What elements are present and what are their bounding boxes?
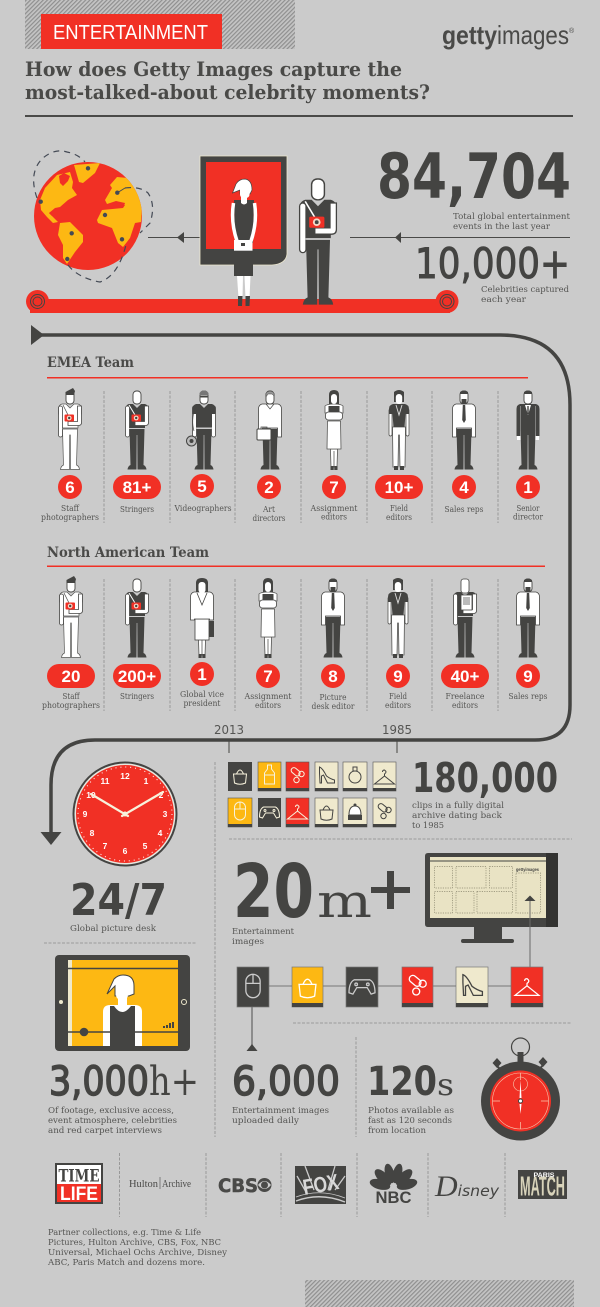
- stat: 180,000 clips: 180,000: [412, 754, 558, 802]
- global vice president: [180, 578, 224, 709]
- stat: 3,000h+ footage: [48, 1059, 199, 1136]
- stringers: Stringers: [120, 505, 154, 515]
- videographers: Videographers: [174, 504, 232, 514]
- staff photographers: [41, 388, 99, 523]
- timeline year labels: [214, 722, 412, 753]
- assignment editors: [244, 578, 292, 711]
- videographers: 5: [197, 477, 207, 496]
- field editors: [385, 578, 411, 711]
- logo: Paris Match: PARIS: [534, 1173, 554, 1179]
- staff photographers: photographers: [42, 701, 100, 711]
- clock: 8: [90, 828, 95, 838]
- assignment editors: 7: [263, 667, 273, 686]
- logo: Hulton Archive: Archive: [162, 1179, 191, 1190]
- staff photographers: photographers: [41, 513, 99, 523]
- workflow row: [237, 967, 543, 1007]
- stat: 120s photos: 120: [367, 1059, 437, 1105]
- stat: 84,704 events: Total global entertainment: [453, 212, 571, 222]
- stat: 10,000+ celebrities: Celebrities captured: [481, 285, 569, 295]
- staff photographers: 6: [65, 478, 75, 497]
- clock: 9: [83, 809, 88, 819]
- field editors: editors: [386, 513, 412, 523]
- stringers: [113, 391, 161, 515]
- staff photographers: 20: [62, 667, 80, 686]
- partner collections text: Universal, Michael Ochs Archive, Disney: [48, 1248, 227, 1258]
- logo: Time Life: LIFE: [60, 1184, 98, 1205]
- stat: 20m+ images: m: [317, 874, 372, 928]
- partner collections text: Partner collections, e.g. Time & Life: [48, 1228, 201, 1238]
- logo: Hulton Archive: Hulton: [129, 1179, 158, 1190]
- stat: 3,000h+ footage: 3,000: [49, 1059, 149, 1105]
- red carpet: [26, 290, 458, 313]
- celebrity figure: [232, 179, 255, 306]
- staff photographers: Staff: [62, 692, 80, 702]
- monitor: gettyimages: [516, 867, 539, 872]
- partner collections text: ABC, Paris Match and dozens more.: [47, 1258, 205, 1268]
- senior director: Senior: [516, 504, 540, 514]
- heading: North American team: North American Team: [47, 545, 209, 561]
- clock: 5: [143, 841, 148, 851]
- category tag: entertainment: ENTERTAINMENT: [53, 22, 208, 44]
- assignment editors: [310, 390, 358, 522]
- monitor: [425, 853, 558, 943]
- workflow arrow into monitor: [524, 896, 536, 967]
- stat: 3,000h+ footage: h+: [149, 1059, 199, 1105]
- art directors: Art: [262, 505, 275, 515]
- photographer figure: [300, 179, 336, 305]
- stat: 20m+ images: 20: [233, 849, 314, 935]
- stat: 180,000 clips: to 1985: [412, 821, 444, 831]
- global vice president: 1: [197, 665, 207, 684]
- timeline year labels: 1985: [382, 722, 412, 737]
- global vice president: president: [184, 699, 221, 709]
- stringers: 200+: [118, 667, 156, 686]
- clock: 12: [120, 771, 130, 781]
- freelance editors: [441, 579, 489, 711]
- panel: North American team: [42, 576, 548, 712]
- field editors: [375, 390, 423, 523]
- clock: 7: [103, 841, 108, 851]
- picture desk editor: Picture: [320, 693, 346, 703]
- assignment editors: 7: [329, 478, 339, 497]
- staff photographers: [42, 576, 100, 711]
- sales reps: [444, 390, 484, 515]
- category tag: entertainment: [41, 14, 222, 49]
- picture desk editor: desk editor: [312, 702, 355, 712]
- archive icon grid: [228, 762, 396, 827]
- stringers: 81+: [123, 478, 151, 497]
- logo: gettyimages: ®: [569, 27, 575, 35]
- freelance editors: Freelance: [446, 692, 484, 702]
- sales reps: 9: [523, 667, 533, 686]
- logo: Time Life: [55, 1163, 103, 1205]
- partner collections text: Pictures, Hulton Archive, CBS, Fox, NBC: [48, 1238, 221, 1248]
- global vice president: Global vice: [180, 690, 224, 700]
- arrow: poster to globe: [148, 232, 200, 243]
- stat: 6,000 uploaded: 6,000: [232, 1059, 340, 1105]
- partner collections text: [47, 1228, 227, 1268]
- assignment editors: editors: [255, 701, 281, 711]
- stat: 6,000 uploaded: [232, 1059, 340, 1126]
- logo: Paris Match: [518, 1170, 567, 1202]
- freelance editors: editors: [452, 701, 478, 711]
- logo: gettyimages: [442, 20, 575, 50]
- field editors: 10+: [385, 478, 413, 497]
- picture desk editor: [312, 578, 355, 712]
- timeline year labels: 2013: [214, 722, 244, 737]
- title: [25, 57, 430, 104]
- stat: 10,000+ celebrities: each year: [481, 295, 527, 305]
- field editors: Field: [390, 504, 408, 514]
- clock: 10: [86, 790, 96, 800]
- heading: EMEA team: EMEA Team: [47, 355, 134, 371]
- stat: 180,000 clips: clips in a fully digital: [412, 801, 504, 811]
- field editors: 9: [393, 667, 403, 686]
- tablet: [55, 955, 190, 1051]
- stat: 20m+ images: images: [232, 937, 264, 947]
- logo: NBC: [369, 1163, 418, 1207]
- stat: 180,000 clips: [412, 754, 558, 831]
- stat: 180,000 clips: archive dating back: [412, 811, 503, 821]
- logo: Time Life: TIME: [58, 1166, 100, 1186]
- poster backdrop: [200, 156, 287, 265]
- art directors: directors: [252, 514, 286, 524]
- clock: 11: [100, 776, 110, 786]
- field editors: Field: [389, 692, 407, 702]
- stat: 120s photos: s: [437, 1068, 454, 1103]
- sales reps: Sales reps: [444, 505, 484, 515]
- panel: EMEA team: [41, 388, 544, 524]
- arrow: stats to photographer: [350, 232, 570, 243]
- senior director: 1: [523, 478, 533, 497]
- stat: 24/7: 24/7: [70, 875, 167, 926]
- stat: 120s photos: Photos available as: [368, 1106, 454, 1116]
- logo: Fox: FOX: [301, 1169, 341, 1200]
- stat: 3,000h+ footage: and red carpet interviews: [48, 1126, 162, 1136]
- title: How does Getty Images capture the: [25, 57, 402, 81]
- stat: 10,000+ celebrities: [415, 239, 570, 305]
- stat: 84,704 events: events in the last year: [453, 222, 551, 232]
- videographers: [174, 390, 232, 514]
- title: most-talked-about celebrity moments?: [25, 80, 430, 104]
- stat: 24/7: Global picture desk: [70, 924, 157, 934]
- stat: 120s photos: fast as 120 seconds: [368, 1116, 452, 1126]
- stringers: Stringers: [120, 692, 154, 702]
- clock: 1: [144, 776, 149, 786]
- clock: 6: [123, 846, 128, 856]
- stat: 6,000 uploaded: Entertainment images: [232, 1106, 329, 1116]
- staff photographers: Staff: [61, 504, 80, 514]
- logo: gettyimages: images: [497, 20, 569, 50]
- stat: 120s photos: from location: [368, 1126, 426, 1136]
- clock: [72, 762, 178, 866]
- bottom hatch band: [305, 1280, 574, 1307]
- logo: Disney: Disney: [434, 1170, 500, 1203]
- sales reps: [508, 578, 548, 702]
- assignment editors: Assignment: [244, 692, 292, 702]
- stat: 10,000+ celebrities: 10,000+: [415, 239, 570, 288]
- art directors: 2: [264, 478, 274, 497]
- stat: 20m+ images: Entertainment: [232, 927, 295, 937]
- stat: 6,000 uploaded: uploaded daily: [232, 1116, 299, 1126]
- logo: CBS: CBS: [218, 1175, 258, 1197]
- art directors: [252, 391, 286, 524]
- picture desk editor: 8: [328, 667, 338, 686]
- assignment editors: Assignment: [310, 504, 358, 514]
- logo: NBC: NBC: [376, 1189, 412, 1207]
- stat: 120s photos: [367, 1059, 454, 1136]
- top hatch band: [25, 0, 295, 49]
- sales reps: 4: [459, 478, 469, 497]
- field editors: editors: [385, 701, 411, 711]
- clock: 3: [163, 809, 168, 819]
- stopwatch: [481, 1038, 560, 1140]
- globe: [34, 151, 153, 282]
- stat: 3,000h+ footage: event atmosphere, celebrities: [48, 1116, 177, 1126]
- stat: 20m+ images: [232, 849, 410, 947]
- senior director: director: [513, 512, 544, 522]
- logo: gettyimages: getty: [442, 20, 497, 50]
- freelance editors: 40+: [451, 667, 479, 686]
- senior director: [513, 390, 544, 522]
- timeline track arrow: [31, 325, 570, 845]
- stringers: [113, 579, 161, 702]
- stat: 3,000h+ footage: Of footage, exclusive access,: [48, 1106, 174, 1116]
- logo: Hulton Archive: [129, 1177, 191, 1190]
- arrow: mouse down to 6,000: [246, 1007, 258, 1051]
- clock: 4: [158, 828, 163, 838]
- clock: 2: [159, 790, 164, 800]
- sales reps: Sales reps: [508, 692, 548, 702]
- assignment editors: editors: [321, 512, 347, 522]
